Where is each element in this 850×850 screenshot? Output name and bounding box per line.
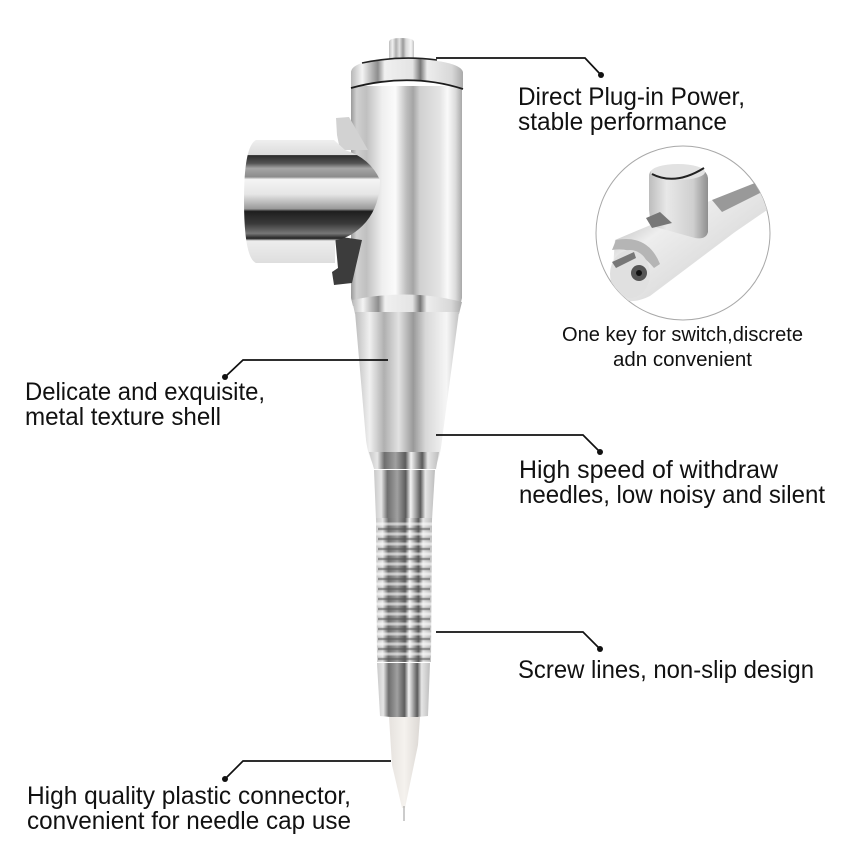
callout: direct plug-in power: [518, 83, 745, 136]
needle: [403, 806, 405, 821]
main barrel: [351, 86, 462, 306]
callout: plastic connector: [27, 782, 351, 835]
pen product image: [244, 38, 463, 821]
callout: metal shell: metal texture shell: [25, 403, 221, 431]
inset: switch close-up: [596, 146, 770, 320]
plastic tip: [389, 717, 420, 808]
callout: direct plug-in power: stable performance: [518, 108, 727, 136]
leader line: plastic connector: [222, 761, 391, 782]
cap groove: [351, 80, 463, 89]
cap top line: [362, 58, 437, 63]
callout: high speed: High speed of withdraw: [519, 456, 779, 484]
barrel shoulder band: [352, 294, 462, 314]
callout: plastic connector: High quality plastic connector,: [27, 782, 351, 810]
grip lower sleeve: [377, 663, 430, 718]
inset caption: adn convenient: [613, 349, 752, 371]
callout: metal shell: Delicate and exquisite,: [25, 378, 265, 406]
leader line: direct plug-in power: [436, 58, 604, 78]
ribbed grip: [376, 518, 432, 662]
inset caption: [562, 324, 803, 371]
cone collar: [369, 452, 439, 469]
leader line: high speed: [436, 435, 603, 455]
callout: direct plug-in power: Direct Plug-in Power,: [518, 83, 745, 111]
callout: high speed: needles, low noisy and silent: [519, 481, 825, 509]
inset pen image: [610, 164, 770, 301]
top pin: [389, 38, 414, 60]
side switch cylinder: [244, 140, 380, 263]
top bracket: [336, 117, 368, 150]
callout: screw lines: Screw lines, non-slip design: [518, 656, 814, 684]
callout: metal shell: [25, 378, 265, 431]
grip upper sleeve: [374, 470, 435, 520]
leader line: metal shell: [222, 360, 388, 380]
bottom bracket: [332, 236, 362, 285]
inset circle: [596, 146, 770, 320]
leader line: screw lines: [436, 632, 603, 652]
inset caption: One key for switch,discrete: [562, 324, 803, 346]
tapered cone: [355, 312, 459, 466]
callout: plastic connector: convenient for needle cap use: [27, 807, 351, 835]
top cap: [351, 58, 463, 88]
callout: high speed: [519, 456, 825, 509]
